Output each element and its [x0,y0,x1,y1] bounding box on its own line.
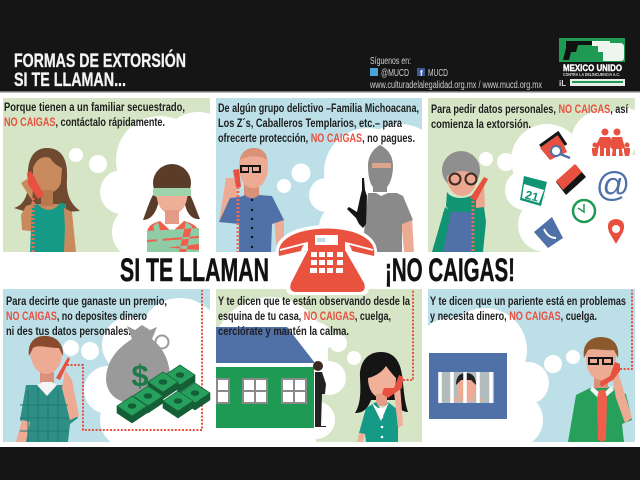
dotted phone cord [620,290,632,369]
panel text: esquina de tu casa, NO CAIGAS, cuelga, [218,309,391,323]
logo: Mexico Unido: MEXICO UNIDO [563,63,622,74]
panel text [218,101,419,145]
icon: calendar: 21 [524,188,540,205]
woman on the phone [355,352,408,442]
dotted phone cord [403,290,413,380]
panel text [218,294,410,338]
panel text: comienza la extorsión. [431,117,531,131]
thought cloud [277,124,422,252]
icon: clock [573,200,595,222]
relative behind bars [429,353,507,419]
icon: house with magnifier [540,133,570,160]
panel: casa observada [212,289,422,444]
panel text: Porque tienen a un familiar secuestrado, [4,100,185,114]
keypad [310,252,343,273]
social links and websites: f [420,69,423,78]
social links and websites [369,56,542,91]
headline left: SI TE LLAMAN [120,252,269,288]
woman on the phone [14,148,80,252]
grandmother on the phone [432,151,488,252]
social links and websites: Síguenos en: [370,56,411,67]
logo: Mexico Unido: CONTRA LA DELINCUENCIA A.C. [563,72,620,77]
title: FORMAS DE EXTORSIÓN [14,48,186,72]
social links and websites: MUCD [428,68,448,79]
icon: calendar [520,176,547,206]
thought cloud [428,308,580,442]
panel: premio [3,289,222,448]
panel text: Para decirte que ganaste un premio, [6,294,167,308]
windows [216,378,307,404]
icon: notebook [534,217,563,248]
central red telephone [275,225,377,295]
money bag [106,325,170,404]
icon: at sign: @ [596,166,630,204]
spy behind the house [313,361,326,427]
thought cloud [212,297,361,444]
icon: location pin [608,219,624,244]
panel text: ni des tus datos personales. [6,324,131,338]
man with glasses on the phone [219,148,284,252]
panel text [4,100,185,129]
stacks of money [117,365,210,423]
dotted phone cord [67,290,202,430]
panel text: Los Z´s, Caballeros Templarios, etc.– para [218,116,402,130]
title [14,48,186,91]
panel text: NO CAIGAS, no deposites dinero [6,309,147,323]
thought cloud [69,112,210,252]
panel text: y necesita dinero, NO CAIGAS, cuelga. [430,309,597,323]
man on the phone [16,336,79,442]
handset window [315,235,338,245]
social links and websites: @MUCD [381,68,409,79]
kidnapped girl [143,164,200,252]
headline right: ¡NO CAIGAS! [385,252,515,288]
panel text [6,294,167,338]
title: SI TE LLAMAN... [14,69,126,91]
social links and websites: www.culturadelalegalidad.org.mx / www.mucd.org.mx [369,80,542,91]
panel text: Para pedir datos personales, NO CAIGAS, así [431,102,628,116]
masked man with rifle [347,145,414,252]
top header band [0,0,640,92]
panel text: De algún grupo delictivo –Familia Michoacana, [218,101,419,115]
money bag: $ [131,358,149,393]
icon: family [592,128,630,156]
panel text: ofrecerte protección, NO CAIGAS, no pagues. [218,131,415,145]
thought cloud [479,108,640,255]
logo: Mexico Unido: iL [559,79,566,88]
house [216,327,315,428]
panel text: cerciórate y mantén la calma. [218,324,349,338]
panel text: Y te dicen que te están observando desde la [218,294,410,308]
panel: grupo delictivo [216,98,422,252]
panel text [431,102,628,131]
logo: Mexico Unido [559,38,625,88]
panel text: NO CAIGAS, contáctalo rápidamente. [4,115,165,129]
panel text [430,294,626,323]
icon: credit card [556,164,586,195]
bottom black band [0,447,640,480]
panel: datos personales [428,98,640,255]
man with tie on the phone [568,337,632,442]
panel: familiar secuestrado [3,98,210,252]
panel: pariente en problemas [416,289,635,447]
thought cloud [63,298,210,442]
